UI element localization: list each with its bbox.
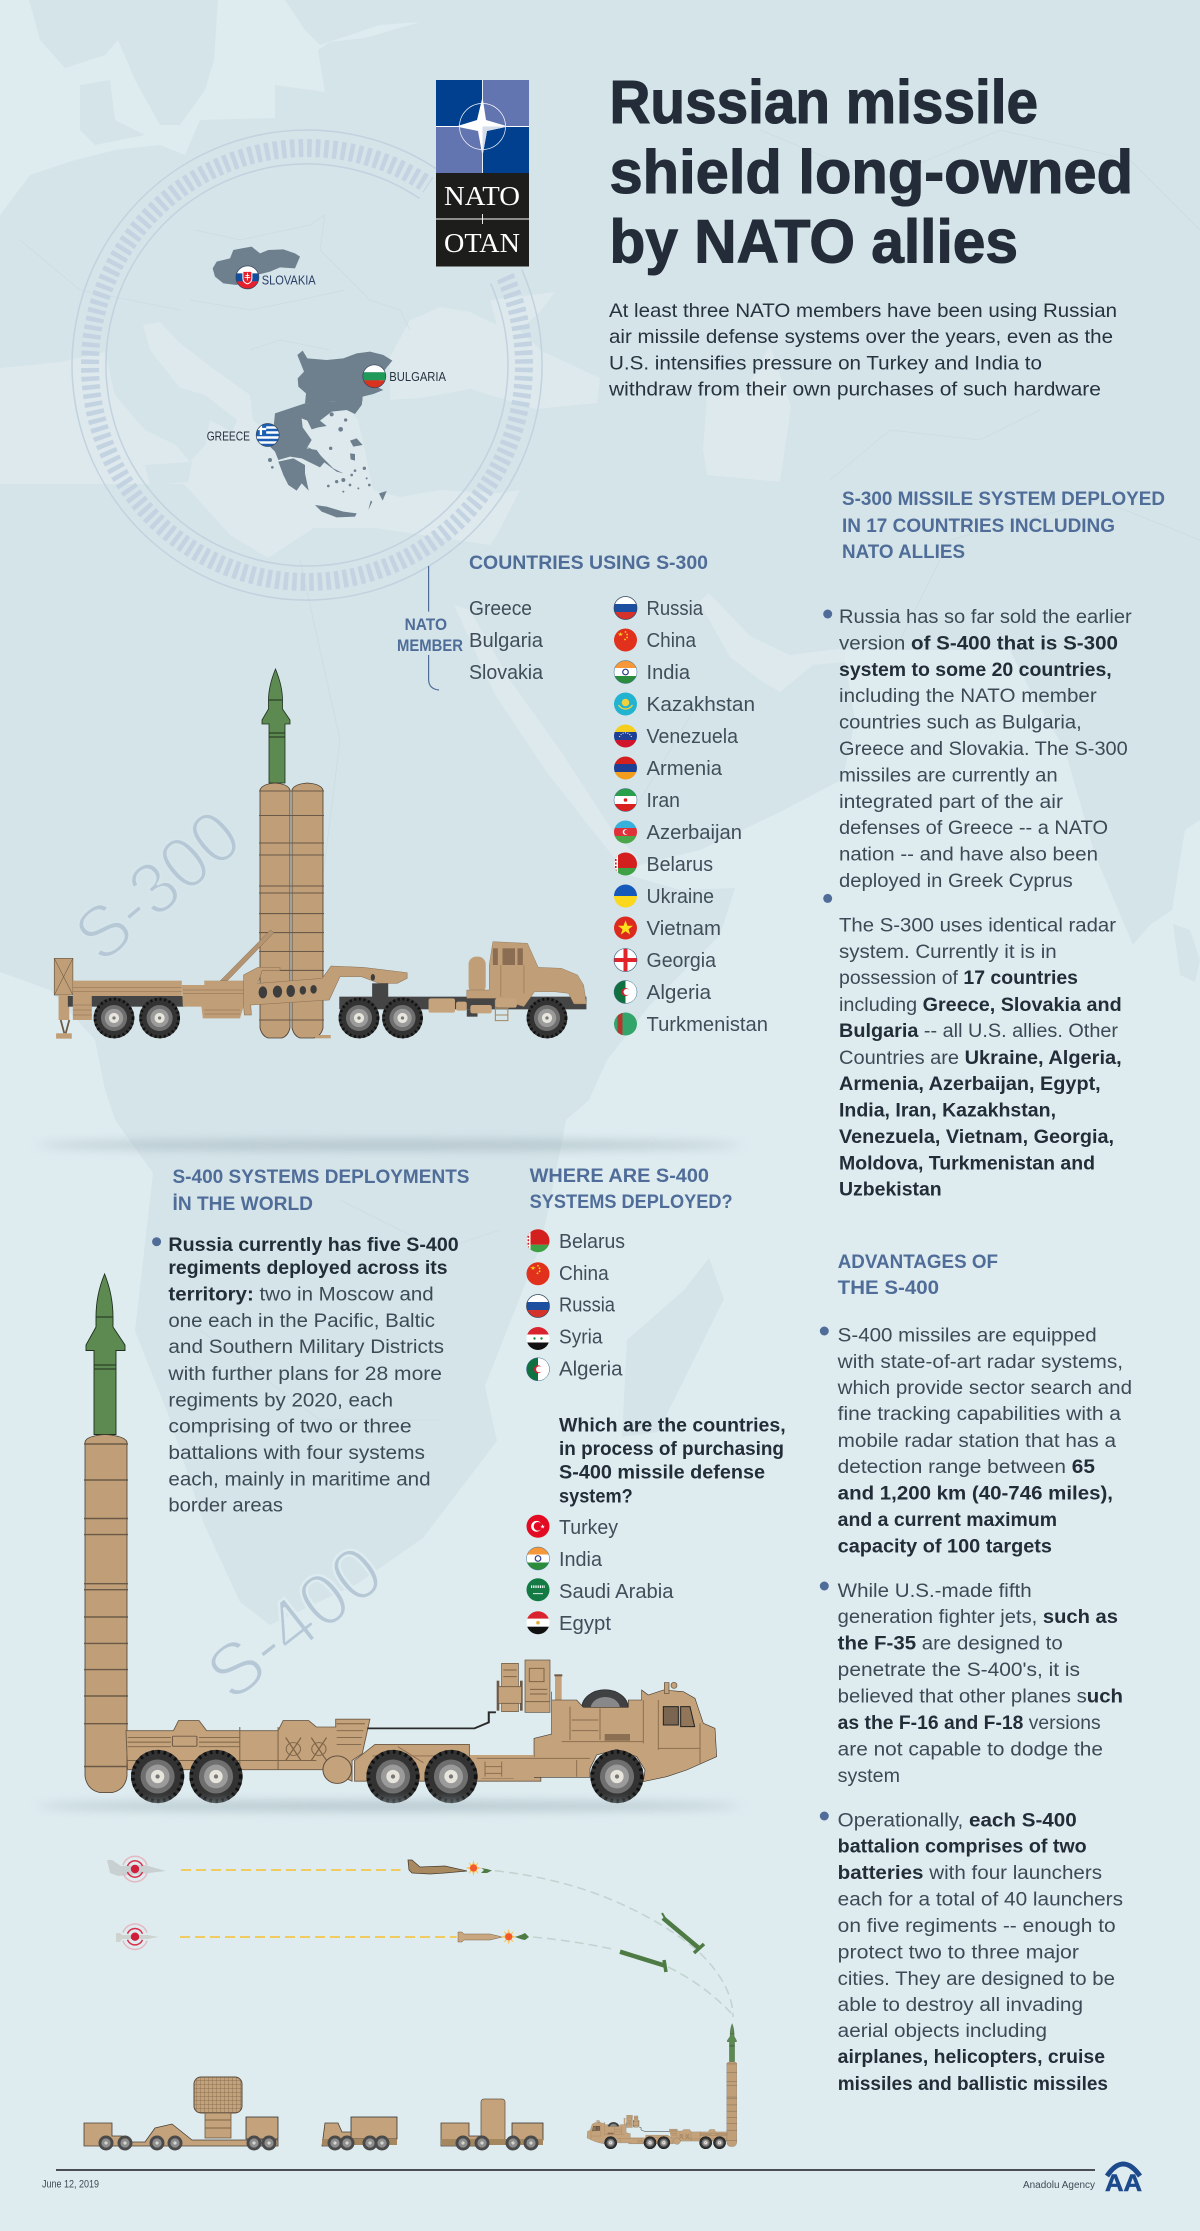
text block: radar advantage: mobile radar station that has a [838,1431,1116,1452]
bullet [823,610,832,618]
S-300 launch tubes [259,783,324,1038]
text block: S-300 facts: Armenia, Azerbaijan, Egypt, [839,1074,1101,1095]
heading: S-400 deployments: İN THE WORLD [172,1194,313,1215]
heading: S-300 missile system deployed: S-300 MISSILE SYSTEM DEPLOYED [842,489,1165,510]
text block: radar advantage: which provide sector search and [837,1378,1132,1399]
text block: S-300 facts: Uzbekistan [839,1180,942,1201]
text block: radar advantage: capacity of 100 targets [838,1536,1052,1558]
text block: S-300 facts: missiles are currently an [839,766,1058,786]
question: countries purchasing S-400: system? [559,1486,633,1508]
text block: S-400 regiments: regiments deployed across its [168,1258,448,1279]
list: countries using S-300 with flags: Algeria [646,982,712,1004]
ground shadow: S-400 [39,1801,739,1811]
text block: S-400 regiments: border areas [168,1496,283,1517]
bullet [823,894,832,903]
list: countries using S-300 with flags: Vietnam [646,918,721,940]
heading: advantages of the S-400 [838,1252,998,1299]
S-400 wheels [131,1750,644,1803]
yellow path: plane [181,1869,400,1871]
NATO member bracket [397,566,463,690]
list: NATO members using S-300: Bulgaria [469,630,544,652]
bottom launcher vehicle [587,2024,737,2149]
antenna vehicle [441,2099,543,2150]
label: Slovakia: SLOVAKIA [262,273,316,287]
text block: S-300 facts: defenses of Greece -- a NATO [839,818,1108,839]
text block: S-400 regiments: territory: two in Moscow and [168,1284,434,1305]
text block: S-300 facts: including Greece, Slovakia and [839,995,1122,1016]
text block: battalion composition: able to destroy all invading [838,1995,1083,2016]
text block: S-400 regiments [152,1235,459,1517]
interceptor: missile [515,1933,529,1940]
text block: S-400 regiments: each, mainly in maritime and [168,1470,431,1490]
title: shield long-owned [610,138,1133,206]
command vehicle [322,2117,397,2150]
text block: S-300 facts: including the NATO member [839,686,1097,707]
text block: S-400 regiments: regiments by 2020, each [168,1390,393,1412]
bullet [820,1812,829,1820]
list: countries purchasing S-400: Turkey [559,1517,618,1539]
list: countries using S-300 with flags: Azerbaijan [646,822,742,844]
text block: radar advantage: with state-of-art radar systems, [837,1352,1123,1373]
ground shadow: S-300 [39,1140,739,1150]
text block: S-400 regiments: comprising of two or three [168,1417,412,1438]
flag: Bulgaria [362,364,386,388]
list: S-400 deployed countries: Belarus [559,1231,625,1253]
text block: S-400 regiments: with further plans for 28 more [167,1364,442,1385]
text block: S-400 regiments: one each in the Pacific, Baltic [168,1311,435,1332]
explosion: plane [466,1860,482,1876]
heading: where are S-400 deployed [530,1166,733,1213]
text block: radar advantage: S-400 missiles are equipped [838,1326,1097,1347]
NATO OTAN logo [436,80,529,266]
watermark: S-300: S-300 [59,793,256,978]
list: S-400 deployed countries: Syria [559,1327,603,1349]
list: countries using S-300 with flags: Kazakhstan [646,694,755,716]
interceptor: plane [481,1868,492,1873]
list: countries purchasing S-400: India [559,1549,603,1571]
text block: battalion composition: battalion comprises of two [838,1837,1087,1858]
heading: advantages of the S-400: ADVANTAGES OF [838,1252,998,1273]
text block: fighter jets: believed that other planes s uch [838,1686,1123,1708]
text block: radar advantage [820,1326,1132,1558]
text block: S-400 regiments: and Southern Military Districts [168,1337,444,1358]
S-400 missile [86,1274,125,1434]
list: S-400 deployed countries: Russia [559,1294,616,1316]
list: countries using S-300 with flags: Iran [646,790,680,812]
text block: battalion composition: Operationally, each S-400 [838,1810,1077,1831]
ghost cruise missile [116,1933,159,1942]
intro text: withdraw from their own purchases of such hardware [608,379,1101,401]
question: countries purchasing S-400 [559,1415,786,1508]
text block: S-300 facts: The S-300 uses identical radar [839,916,1117,937]
target: missile [123,1924,147,1949]
flight path: plane [495,1871,733,2017]
NATO member bracket: NATO [405,616,447,634]
S-400 launcher illustration [84,1274,717,1803]
text block: fighter jets: as the F-16 and F-18 versions [838,1713,1101,1734]
list: countries purchasing S-400: Egypt [559,1613,611,1635]
text block: S-400 regiments: Russia currently has five S-400 [168,1235,459,1256]
missile in flight 2 [620,1952,666,1972]
text block: radar advantage: and 1,200 km (40-746 miles), [838,1484,1113,1504]
list: countries using S-300 with flags: India [646,662,691,684]
list: countries purchasing S-400: Saudi Arabia [559,1581,674,1603]
list: NATO members using S-300: Greece [469,598,532,620]
text block: fighter jets: penetrate the S-400's, it is [838,1660,1080,1681]
question: countries purchasing S-400: in process of purchasing [559,1439,784,1460]
S-300 wheels [94,998,567,1038]
list: S-400 deployed countries: Algeria [559,1359,623,1381]
text block: battalion composition: each for a total of 40 launchers [838,1890,1123,1911]
text block: S-300 facts: nation -- and have also been [839,845,1098,866]
heading: where are S-400 deployed: WHERE ARE S-400 [530,1166,709,1187]
text block: battalion composition: protect two to three major [838,1943,1080,1964]
S-400 launch tube [84,1434,128,1793]
list: NATO members using S-300: Slovakia [469,662,544,684]
text block: S-300 facts: possession of 17 countries [839,968,1078,989]
text block: fighter jets [820,1581,1123,1787]
text block: S-300 facts: Moldova, Turkmenistan and [839,1154,1095,1175]
intro text: At least three NATO members have been using Russian [609,300,1117,322]
text block: S-400 regiments: battalions with four systems [168,1443,425,1464]
list: countries using S-300 with flags [614,596,768,1036]
Anadolu Agency logo: AA [1105,2170,1142,2197]
text block: fighter jets: generation fighter jets, such as [838,1607,1118,1628]
list: S-400 deployed countries [526,1229,625,1381]
text block: battalion composition: cities. They are designed to be [838,1969,1115,1990]
text block: S-300 facts: Greece and Slovakia. The S-300 [839,739,1128,760]
list: countries using S-300 with flags: Armenia [646,758,723,780]
list: countries using S-300 with flags: Belarus [646,854,713,876]
S-400 trailer [126,1712,541,1783]
text block: fighter jets: system [838,1766,900,1787]
label: Bulgaria: BULGARIA [389,370,447,384]
bullet [820,1582,829,1590]
text block: S-300 facts: India, Iran, Kazakhstan, [839,1100,1056,1122]
text block: S-300 facts [823,607,1132,1201]
title: Russian missile [610,68,1038,136]
bullet [820,1326,829,1336]
intro text: air missile defense systems over the years, even as the [609,326,1113,348]
text block: battalion composition: aerial objects including [838,2021,1047,2042]
background world map [0,0,1200,1625]
text block: S-300 facts: countries such as Bulgaria, [839,712,1082,733]
text block: battalion composition: on five regiments -- enough to [838,1916,1116,1937]
interception diagram [107,1856,733,2017]
yellow path: missile [180,1936,457,1938]
S-300 trailer and truck [54,930,586,1039]
radar vehicle [84,2077,278,2150]
missile in flight 1 [662,1913,704,1953]
intro text [608,300,1117,401]
text block: S-300 facts: version of S-400 that is S-300 [839,634,1118,655]
NATO member bracket: MEMBER [397,637,463,655]
target: plane [123,1856,147,1882]
text block: fighter jets: the F-35 are designed to [838,1634,1063,1654]
text block: battalion composition: batteries with four launchers [838,1863,1102,1884]
flag: Greece [256,423,280,447]
list: S-400 deployed countries: China [559,1263,610,1285]
S-300 launcher illustration [54,669,586,1039]
list: countries using S-300 with flags: Ukraine [646,886,714,908]
NATO OTAN logo: OTAN [444,228,520,258]
fighter plane [408,1860,467,1874]
NATO OTAN logo: NATO [444,181,520,211]
heading: S-400 deployments [172,1167,470,1215]
cruise missile [458,1932,502,1942]
explosion: missile [501,1929,517,1945]
list: countries using S-300 with flags: Turkmenistan [646,1014,768,1036]
flag: Slovakia [235,265,259,289]
map: Slovakia, Bulgaria, Greece [207,247,447,517]
list: countries using S-300 with flags: Russia [646,598,704,620]
text block: S-300 facts: Russia has so far sold the earlier [839,607,1132,628]
heading: advantages of the S-400: THE S-400 [838,1278,939,1299]
text block: fighter jets: are not capable to dodge the [838,1740,1103,1760]
text block: battalion composition: missiles and ballistic missiles [838,2074,1108,2095]
label: Greece: GREECE [207,430,250,444]
country shapes [213,247,392,517]
heading: countries using S-300: COUNTRIES USING S-300 [469,553,708,574]
footer rule [56,2169,1095,2171]
text block: battalion composition: airplanes, helicopters, cruise [838,2047,1105,2068]
list: countries using S-300 with flags: China [646,630,697,652]
text block: radar advantage: fine tracking capabilities with a [838,1404,1121,1425]
list: NATO members using S-300 [469,598,544,684]
heading: S-300 missile system deployed [842,489,1165,563]
bullet [152,1237,161,1246]
list: countries using S-300 with flags: Venezuela [646,726,739,748]
text block: S-300 facts: system to some 20 countries, [839,660,1112,681]
heading: S-300 missile system deployed: NATO ALLIES [842,542,965,563]
flight path: missile [533,1937,733,2015]
date: June 12, 2019 [42,2179,99,2191]
text block: S-300 facts: Bulgaria -- all U.S. allies. Other [839,1021,1119,1042]
question: countries purchasing S-400: Which are the countries, [559,1415,786,1436]
text block: radar advantage: detection range between 65 [838,1457,1095,1478]
list: countries using S-300 with flags: Georgia [646,950,717,972]
intro text: U.S. intensifies pressure on Turkey and India to [609,352,1042,374]
S-400 truck cab and containers [470,1660,717,1782]
ghost plane [107,1860,166,1876]
heading: where are S-400 deployed: SYSTEMS DEPLOYED? [530,1192,733,1213]
title [610,68,1133,276]
text block: S-300 facts: deployed in Greek Cyprus [839,871,1073,892]
title: by NATO allies [610,208,1018,276]
text block: battalion composition [820,1810,1123,2095]
heading: S-300 missile system deployed: IN 17 COUNTRIES INCLUDING [842,516,1115,537]
text block: S-300 facts: Countries are Ukraine, Algeria, [839,1048,1122,1069]
text block: S-300 facts: integrated part of the air [839,792,1064,813]
question: countries purchasing S-400: S-400 missile defense [559,1463,765,1484]
text block: S-300 facts: system. Currently it is in [839,942,1057,963]
credit: Anadolu Agency [1023,2180,1095,2191]
text block: S-300 facts: Venezuela, Vietnam, Georgia, [839,1127,1114,1148]
watermark: S-400: S-400 [191,1529,398,1716]
S-300 missile [262,669,290,783]
text block: radar advantage: and a current maximum [838,1510,1057,1531]
radar ring around Europe [72,130,542,600]
heading: S-400 deployments: S-400 SYSTEMS DEPLOYMENTS [172,1167,470,1188]
text block: fighter jets: While U.S.-made fifth [838,1581,1032,1602]
list: countries purchasing S-400 [526,1514,674,1635]
